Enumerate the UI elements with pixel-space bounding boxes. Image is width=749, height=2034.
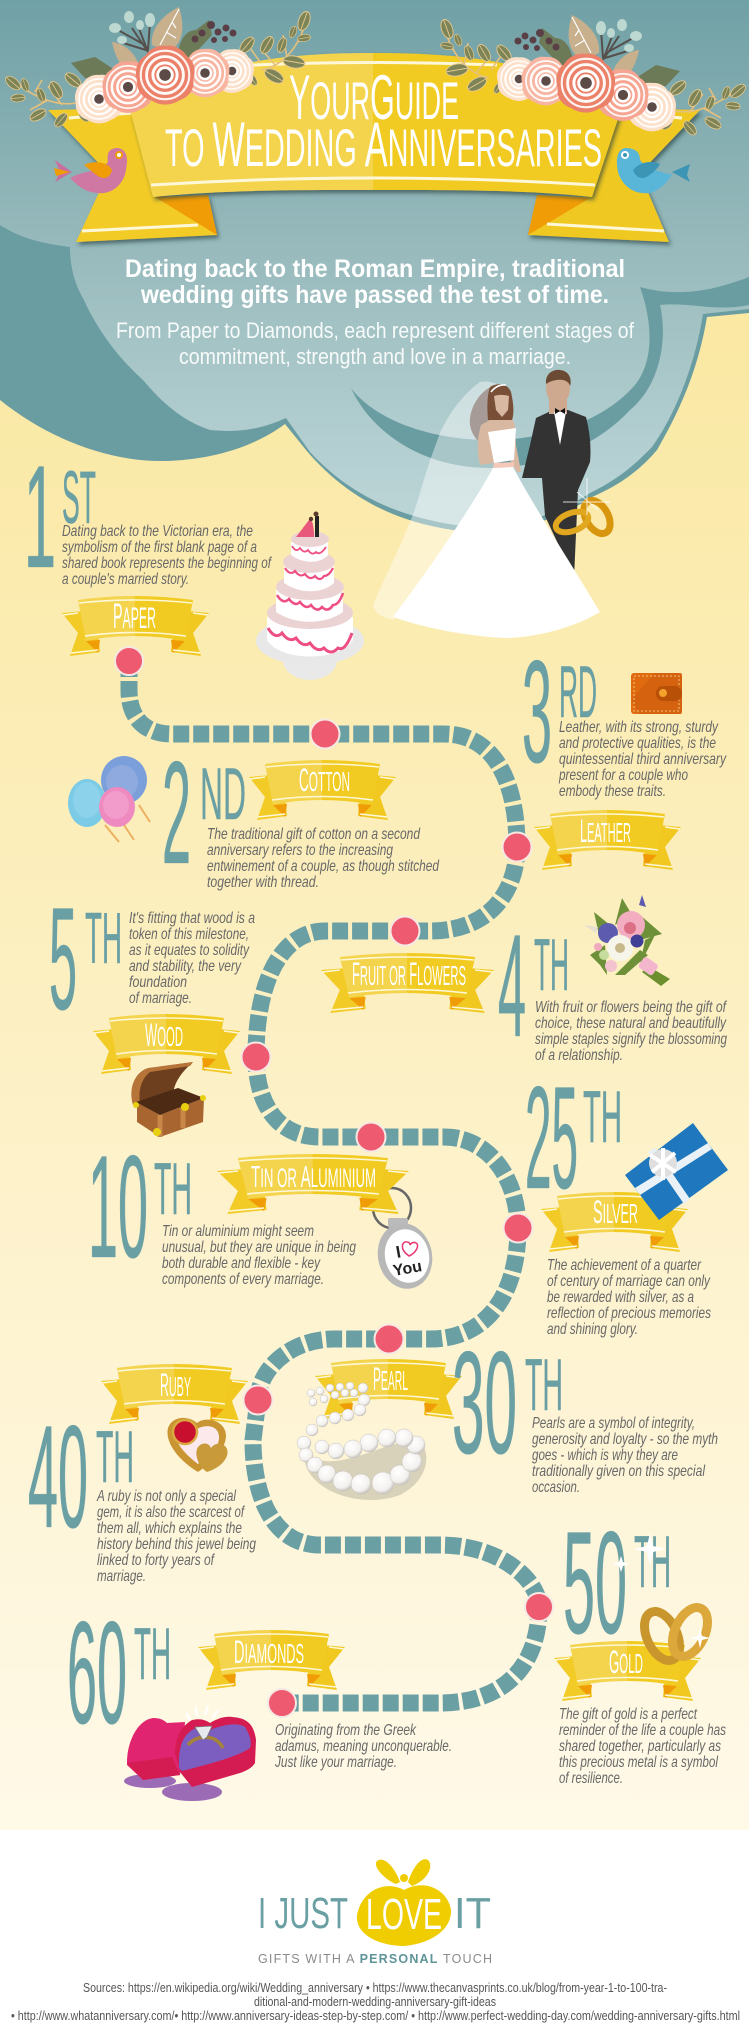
icon: wedding cake <box>256 512 364 680</box>
sources: Sources: https://en.wikipedia.org/wiki/Wedding_anniversary • https://www.thecanvasprints.co.uk/blog/from-year-1-to-100-tra- <box>83 1981 667 1995</box>
text 30th: Pearls are a symbol of integrity, <box>532 1415 695 1432</box>
text 40th: them all, which explains the <box>97 1520 242 1537</box>
text 1st: a couple's married story. <box>62 571 189 588</box>
number 30th <box>452 1321 563 1484</box>
icon: gold rings <box>553 478 616 538</box>
section: 30th pearl: TH <box>525 1345 563 1426</box>
text 25th: be rewarded with silver, as a <box>547 1289 694 1306</box>
number 1st: 1 <box>24 435 56 598</box>
logo <box>258 1859 492 1966</box>
section: 60th diamonds: TH <box>134 1614 171 1695</box>
text 30th <box>532 1415 718 1496</box>
text 1st: Dating back to the Victorian era, the <box>62 523 253 540</box>
section: 50th gold <box>554 1501 726 1787</box>
ribbon pearl: PEARL <box>373 1361 408 1397</box>
text 60th: Originating from the Greek <box>275 1722 417 1739</box>
icon: keyring: I <box>394 1242 402 1262</box>
ribbon leather: LEATHER <box>580 813 631 849</box>
ribbon gold <box>554 1641 701 1701</box>
number 5th: 5 <box>49 877 77 1040</box>
text 60th: adamus, meaning unconquerable. <box>275 1738 452 1755</box>
text 40th <box>96 1488 256 1585</box>
sources <box>11 1981 740 2023</box>
title banner <box>48 53 700 242</box>
ribbon paper: PAPER <box>113 597 156 636</box>
icon: keyring <box>372 1188 438 1294</box>
ribbon tin or aluminium: TIN OR ALUMINIUM <box>251 1159 376 1194</box>
ribbon leather <box>534 810 681 870</box>
icon: pink bird <box>54 148 127 193</box>
section: 1st paper: ST <box>62 456 96 539</box>
section: 30th pearl <box>297 1321 718 1500</box>
text 40th: gem, it is also the scarcest of <box>97 1504 245 1521</box>
number 40th: 40 <box>28 1395 88 1558</box>
text 10th: unusual, but they are unique in being <box>162 1239 356 1256</box>
section: 40th ruby <box>28 1364 256 1585</box>
section: 50th gold: TH <box>634 1522 671 1603</box>
icon: ring box heart <box>124 1706 256 1801</box>
icon: entwined gold rings <box>613 1533 715 1666</box>
number 50th <box>563 1501 671 1664</box>
text 60th <box>274 1722 452 1771</box>
text 10th <box>162 1223 356 1288</box>
text 40th: linked to forty years of <box>97 1552 215 1569</box>
icon: bouquet <box>584 895 670 986</box>
text 5th: foundation <box>129 974 187 991</box>
text 4th <box>535 999 727 1064</box>
text 40th: marriage. <box>97 1568 146 1585</box>
section: 25th silver <box>525 1056 728 1338</box>
floral decoration right <box>439 15 748 137</box>
text 2nd: anniversary refers to the increasing <box>207 842 393 859</box>
intro text: Dating back to the Roman Empire, traditional <box>125 255 625 283</box>
section: 60th diamonds <box>67 1591 452 1801</box>
text 25th: and shining glory. <box>547 1321 638 1338</box>
text 3rd <box>558 719 727 800</box>
section: 3rd leather: RD <box>559 652 597 733</box>
footer <box>0 1830 749 2034</box>
ribbon diamonds <box>198 1630 345 1690</box>
floral decoration left <box>3 7 312 129</box>
text 25th <box>547 1257 711 1338</box>
section: 2nd cotton: ND <box>200 754 246 835</box>
number 10th: 10 <box>88 1125 148 1288</box>
number 40th <box>28 1395 134 1558</box>
timeline path <box>115 647 553 1717</box>
text 5th: of marriage. <box>129 990 192 1007</box>
section: 4th fruit or flowers: TH <box>534 925 569 1006</box>
text 2nd <box>207 826 440 891</box>
title text: YOURGUIDE <box>289 63 459 133</box>
text 2nd: together with thread. <box>207 874 319 891</box>
ribbon gold: GOLD <box>609 1644 643 1680</box>
text 10th: components of every marriage. <box>162 1271 324 1288</box>
text 50th: The gift of gold is a perfect <box>559 1706 697 1723</box>
text 3rd: embody these traits. <box>559 783 666 800</box>
ribbon pearl <box>315 1359 462 1419</box>
section: 1st paper <box>24 435 364 680</box>
number 10th <box>88 1125 192 1288</box>
ribbon cotton: COTTON <box>299 762 350 798</box>
intro text <box>116 255 635 369</box>
section: 40th ruby: TH <box>96 1417 134 1498</box>
number 50th: 50 <box>563 1501 627 1664</box>
section: 4th fruit or flowers <box>321 895 727 1067</box>
number 60th <box>67 1591 171 1754</box>
text 3rd: present for a couple who <box>558 767 688 784</box>
sources: ditional-and-modern-wedding-anniversary-gift-ideas <box>254 1995 496 2009</box>
icon: blue bird <box>617 148 690 193</box>
section: 3rd leather <box>522 630 727 870</box>
intro text: wedding gifts have passed the test of time. <box>140 281 609 309</box>
section: 5th wood <box>49 877 255 1137</box>
text 5th: as it equates to solidity <box>129 942 250 959</box>
text 10th: Tin or aluminium might seem <box>162 1223 314 1240</box>
section: 5th wood: TH <box>85 899 122 979</box>
text 40th: history behind this jewel being <box>97 1536 256 1553</box>
text 2nd: entwinement of a couple, as though stitched <box>207 858 440 875</box>
text 50th: of resilience. <box>559 1770 623 1787</box>
ribbon cotton <box>249 760 396 820</box>
text 2nd: The traditional gift of cotton on a second <box>207 826 421 843</box>
text 1st <box>62 523 272 588</box>
section: 2nd cotton <box>68 731 440 894</box>
icon: blue gift box <box>625 1123 728 1220</box>
number 4th: 4 <box>498 904 526 1067</box>
text 5th: and stability, the very <box>129 958 242 975</box>
text 50th <box>559 1706 726 1787</box>
text 5th: token of this milestone, <box>129 926 249 943</box>
number 3rd: 3 <box>522 630 552 793</box>
icon: keyring: You <box>392 1258 423 1280</box>
number 60th: 60 <box>67 1591 127 1754</box>
title text <box>165 63 602 180</box>
ribbon fruit or flowers <box>321 953 494 1013</box>
text 30th: goes - which is why they are <box>532 1447 678 1464</box>
icon: ruby locket <box>167 1418 228 1472</box>
number 30th: 30 <box>452 1321 517 1484</box>
ribbon silver: SILVER <box>593 1194 638 1230</box>
number 2nd: 2 <box>162 731 191 894</box>
text 30th: occasion. <box>532 1479 580 1496</box>
icon: pearl necklace <box>297 1382 426 1500</box>
text 4th: of a relationship. <box>535 1047 623 1064</box>
ribbon wood <box>93 1014 240 1074</box>
intro text: From Paper to Diamonds, each represent different stages of <box>116 318 635 343</box>
text 1st: shared book represents the beginning of <box>62 555 272 572</box>
ribbon silver <box>541 1192 688 1252</box>
section: 25th silver: TH <box>583 1077 622 1158</box>
icon: wallet <box>631 673 682 714</box>
ribbon fruit or flowers: FRUIT OR FLOWERS <box>352 956 466 992</box>
text 40th: A ruby is not only a special <box>96 1488 236 1505</box>
logo: I JUST <box>258 1889 348 1938</box>
ribbon ruby: RUBY <box>160 1367 191 1403</box>
text 60th: Just like your marriage. <box>274 1754 397 1771</box>
number 25th <box>525 1056 622 1219</box>
logo: LOVE <box>366 1890 442 1939</box>
logo: IT <box>454 1889 491 1938</box>
header cloud backdrop <box>0 0 749 532</box>
number 25th: 25 <box>525 1056 578 1219</box>
ribbon wood: WOOD <box>145 1017 183 1053</box>
illustration: bride and groom <box>373 370 616 638</box>
text 10th: both durable and flexible - key <box>162 1255 321 1272</box>
intro text: commitment, strength and love in a marriage. <box>179 344 571 369</box>
ribbon tin or aluminium <box>217 1154 409 1214</box>
section: 10th tin: TH <box>154 1149 192 1230</box>
text 1st: symbolism of the first blank page of a <box>62 539 257 556</box>
ribbon ruby <box>101 1364 248 1424</box>
section: 10th tin <box>88 1125 438 1294</box>
logo: GIFTS WITH A PERSONAL TOUCH <box>258 1952 492 1966</box>
icon: cotton candy <box>68 756 150 842</box>
text 5th <box>129 910 255 1007</box>
text 5th: It's fitting that wood is a <box>129 910 255 927</box>
icon: treasure chest <box>131 1062 206 1137</box>
ribbon diamonds: DIAMONDS <box>234 1634 304 1670</box>
ribbon paper <box>62 596 209 656</box>
